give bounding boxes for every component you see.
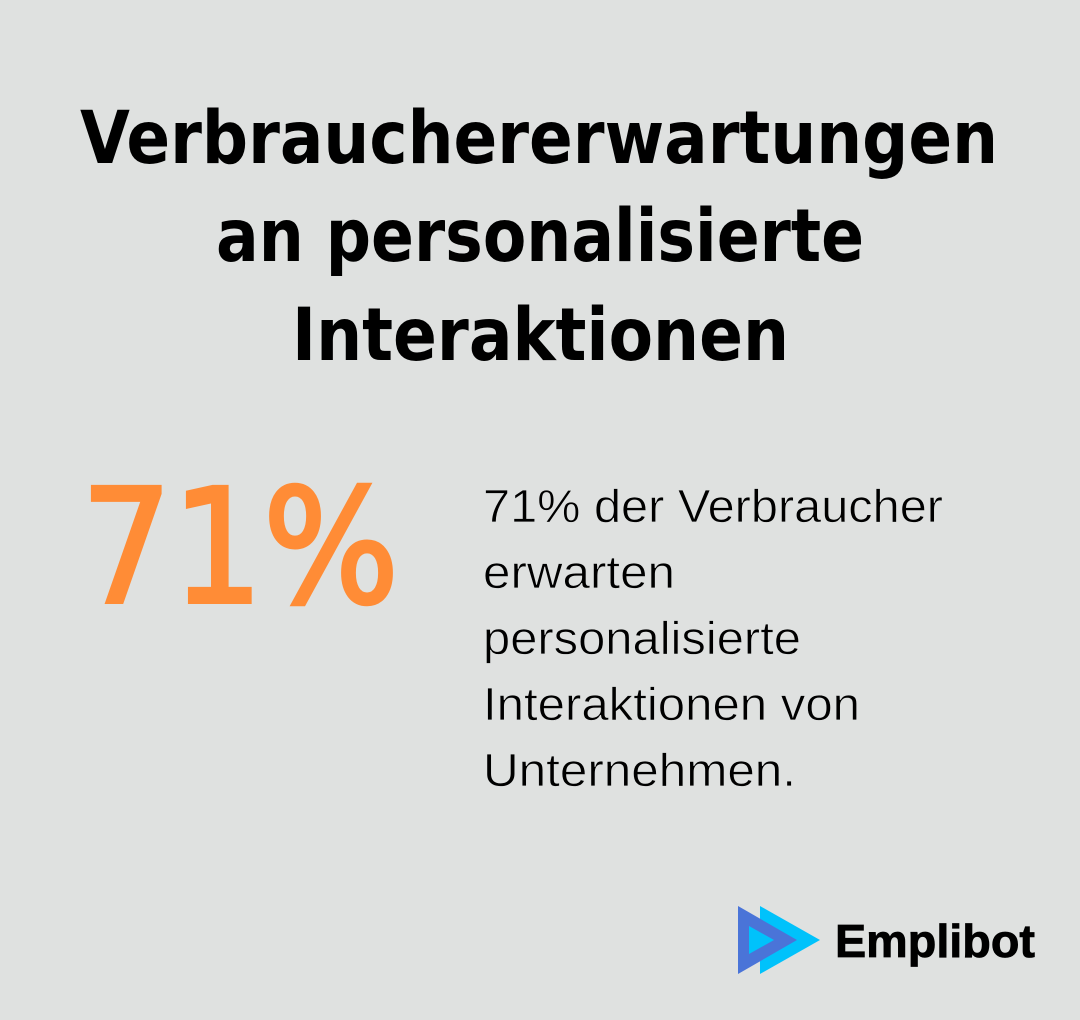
statistic description: Interaktionen von [483, 678, 860, 730]
statistic description: 71% der Verbraucher [483, 480, 943, 532]
statistic description: erwarten [483, 546, 675, 598]
logo wordmark: Emplibot [835, 915, 1035, 967]
icon: double play triangles [738, 906, 820, 974]
logo: Emplibot [738, 906, 1035, 974]
title: Interaktionen [292, 293, 789, 378]
big statistic: 71%: 71% [81, 456, 399, 640]
statistic description [483, 480, 943, 796]
title [80, 96, 998, 378]
statistic description: personalisierte [483, 612, 801, 664]
statistic description: Unternehmen. [483, 744, 796, 796]
title: an personalisierte [216, 194, 864, 279]
